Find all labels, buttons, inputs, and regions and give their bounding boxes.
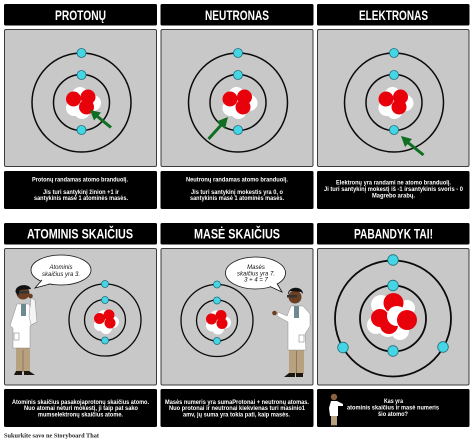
- caption: try it: šio atomo?: [378, 412, 408, 418]
- caption: neutron: Neutronų randamas atomo branduolį.: [186, 178, 288, 184]
- panel: mass number title: [160, 223, 314, 244]
- caption: proton: Jis turi santykinį žinion +1 ir: [43, 190, 120, 196]
- speech bubble: atomic number: Atominis: [48, 265, 73, 271]
- speech bubble: atomic number: [31, 255, 91, 288]
- panel: proton title: [4, 4, 157, 26]
- arrow: pointing at proton: [90, 110, 111, 128]
- panel: neutron title: NEUTRONAS: [205, 7, 269, 23]
- panel: neutron title: [160, 4, 314, 26]
- caption: electron: Ji turi santykinį mokestį iš -1 irsantykinis svoris - 0: [324, 187, 464, 193]
- panel: atomic number title: ATOMINIS SKAIČIUS: [27, 224, 133, 242]
- speech bubble: mass number: [226, 257, 286, 292]
- caption: proton: [4, 171, 157, 209]
- atom: electron diagram: [344, 48, 444, 152]
- caption: mass number: [160, 389, 314, 427]
- character: scientist on phone: [10, 285, 37, 375]
- panel: try it title: PABANDYK TAI!: [354, 226, 433, 242]
- speech bubble: mass number: 3 + 4 = 7: [244, 278, 269, 284]
- footer credit: Sukurkite savo ne Storyboard That: [4, 432, 100, 440]
- panel: neutron atom scene: [161, 30, 313, 166]
- panel: atomic number title: [4, 223, 157, 244]
- caption: neutron: Jis turi santykinį mokestis yra 0, o: [191, 190, 283, 196]
- panel: mass number title: MASĖ SKAIČIUS: [194, 224, 280, 242]
- atom: neutron diagram: [188, 48, 288, 152]
- panel: try it scene: [318, 248, 469, 385]
- caption: try it: Kas yra: [384, 399, 404, 405]
- caption: electron: [317, 171, 470, 209]
- caption: mass number: Masės numeris yra sumaProtonai + neutronų atomas.: [165, 400, 309, 406]
- panel: try it title: [317, 223, 470, 244]
- panel: mass number scene: [161, 248, 313, 385]
- panel: electron title: [317, 4, 470, 26]
- caption: try it: [317, 389, 470, 427]
- caption: atomic number: [4, 389, 157, 427]
- caption: atomic number: Atominis skaičius pasakojaprotonų skaičius atomo.: [12, 400, 149, 406]
- caption: mass number: amv, jų suma yra tokia pati, kaip masės.: [183, 412, 290, 418]
- panel: atomic number scene: [4, 248, 156, 385]
- panel: electron title: ELEKTRONAS: [359, 7, 428, 23]
- arrow: pointing at electron: [401, 136, 424, 155]
- atom: large challenge atom: [335, 255, 451, 376]
- caption: electron: Elektronų yra randami ne atomo branduolį.: [336, 180, 451, 186]
- speech bubble: mass number: Masės: [247, 265, 265, 271]
- panel: proton atom scene: [4, 30, 156, 166]
- atom: lithium small: [69, 280, 141, 356]
- caption: mass number: Nuo protonai ir neutronai kiekvienas turi masinio1: [169, 406, 306, 412]
- character: small scientist: [329, 394, 343, 426]
- speech bubble: mass number: skaičius yra 7.: [237, 272, 275, 278]
- atom: lithium small mass: [181, 281, 253, 356]
- character: scientist explaining: [272, 288, 310, 377]
- caption: proton: Protonų randamas atomo branduolį.: [32, 178, 128, 184]
- panel: electron atom scene: [318, 30, 469, 166]
- atom: proton diagram: [32, 48, 131, 152]
- caption: neutron: santykinis masė 1 atominės masės.: [190, 196, 284, 202]
- caption: proton: santykinis masė 1 atominės masės.: [34, 196, 128, 202]
- caption: atomic number: Nuo atomai neturi mokestį, ji taip pat sako: [24, 406, 138, 412]
- caption: neutron: [160, 171, 314, 209]
- caption: atomic number: mumselektronų skaičius atome.: [38, 412, 123, 418]
- panel: proton title: PROTONŲ: [55, 7, 106, 23]
- speech bubble: atomic number: skaičius yra 3.: [42, 272, 80, 278]
- caption: try it: atominis skaičius ir masė numeris: [347, 406, 440, 412]
- arrow: pointing at neutron: [208, 117, 228, 139]
- caption: electron: Magrebo arabų.: [372, 193, 415, 199]
